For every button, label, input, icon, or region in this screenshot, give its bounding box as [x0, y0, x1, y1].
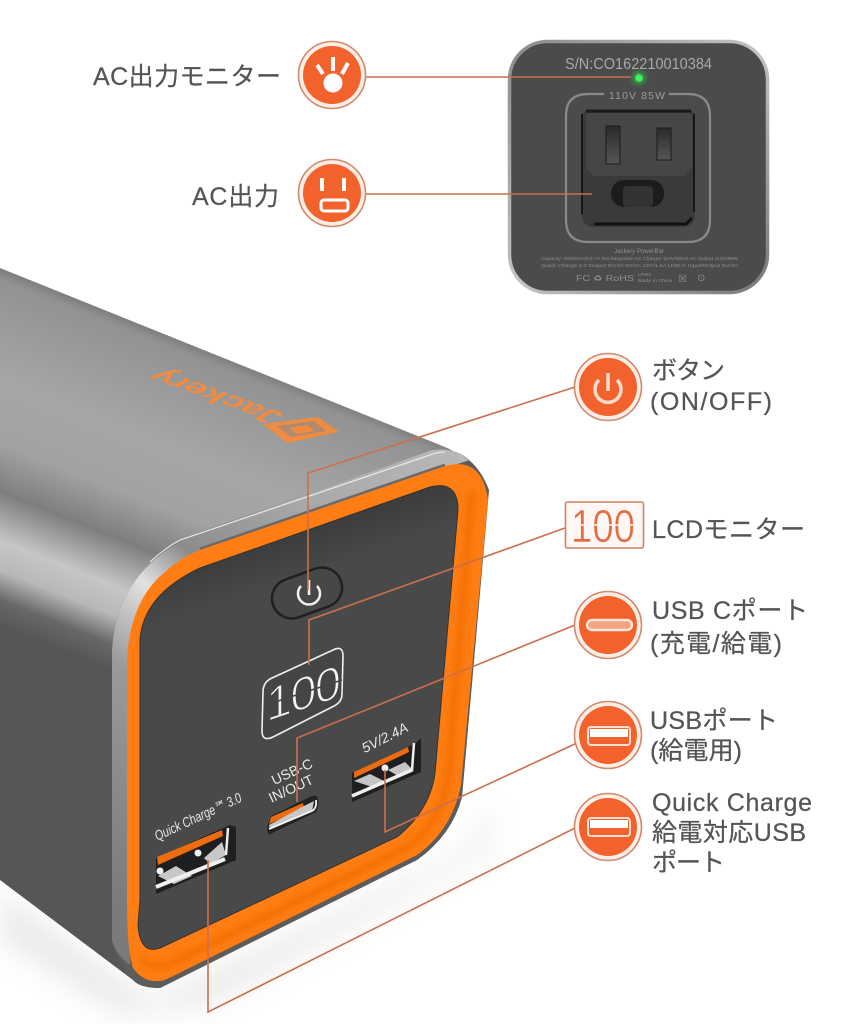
label: USB port: [650, 707, 778, 765]
label: Quick Charge port: Quick Charge: [652, 789, 812, 817]
label: power button: [650, 357, 772, 416]
line: LCD: [309, 528, 565, 665]
fine print: Jackery PowerBar: [614, 249, 664, 255]
icon: power button: [574, 354, 642, 420]
power button: [266, 562, 348, 624]
label: Quick Charge port: ポート: [652, 849, 725, 877]
label: Quick Charge port: 給電対応USB: [652, 819, 806, 847]
fine print: Capacity: 20800mAh/3.7V Rechargeable AC Charger 110V/60HZ AC Output 110V/85W: [541, 256, 739, 261]
AC outlet socket: [582, 110, 695, 227]
line: USB-C: [297, 625, 575, 802]
USB-C port: [267, 796, 318, 834]
serial number: S/N:CO162210010384: [565, 56, 712, 73]
orange bumper: [127, 464, 488, 981]
fine print: FC ♻ RoHS: [576, 274, 634, 283]
label: LCD monitor: LCDモニター: [652, 516, 805, 544]
line: Quick Charge: [208, 827, 577, 1012]
line: AC output: [366, 193, 592, 195]
icon: AC output monitor: [298, 42, 366, 108]
bezel inner shade: [200, 465, 445, 549]
line: USB: [385, 743, 577, 832]
panel: back face of device with AC outlet: [510, 42, 768, 292]
Jackery logo: Jackery: [143, 363, 289, 430]
body top and side faces: [0, 268, 489, 988]
callout leader lines: [208, 77, 631, 1012]
label: USB port: (給電用): [650, 737, 742, 765]
fine print: LP084: [638, 272, 652, 277]
icon: AC output: [298, 160, 366, 226]
metal bezel highlight: [112, 449, 470, 965]
LCD display: 100: [266, 655, 341, 733]
line: power button: [308, 387, 575, 590]
label: USB-C port: USB Cポート: [652, 597, 808, 625]
label: AC output: AC出力: [192, 183, 279, 211]
fine print: ⊙: [697, 273, 705, 284]
outlet frame: [566, 94, 710, 242]
fine print: [541, 249, 739, 285]
label: USB port: USBポート: [650, 707, 778, 735]
USB port: [352, 738, 421, 802]
back plate: [510, 42, 768, 292]
label: AC output monitor: AC出力モニター: [93, 63, 281, 91]
voltage rating: 110V 85W: [609, 90, 665, 102]
USB-C port label: IN/OUT: [266, 771, 316, 806]
fine print: ☒: [678, 274, 687, 285]
dark bezel base: [112, 450, 489, 988]
icon: USB-C port: [574, 592, 642, 658]
fine print: Made in China: [638, 278, 673, 283]
5V/2.4A label: 5V/2.4A: [359, 719, 411, 756]
fine print: Quick Charge 3.0 Output 5V/3A 9V/2A 12V/1.5A USB-C Input/Output 5V/3A: [541, 263, 738, 268]
front panel: [138, 486, 458, 949]
line: AC monitor: [366, 76, 631, 78]
label: USB-C port: (充電/給電): [650, 630, 782, 658]
USB-C port label: USB-C: [269, 755, 315, 788]
floor shadow under device: [0, 800, 490, 1015]
label: USB-C port: [650, 597, 808, 658]
Quick Charge label: Quick Charge℠ 3.0: [152, 789, 244, 844]
green LED: [633, 72, 645, 84]
USB-C port label: [266, 755, 316, 806]
Jackery logo: [143, 363, 339, 443]
label: power button: ボタン: [652, 357, 725, 385]
label: Quick Charge port: [652, 789, 812, 877]
icon: LCD monitor: 100: [571, 500, 635, 552]
Quick Charge USB port: [156, 825, 236, 894]
icon: USB port: [574, 702, 642, 768]
panel: power bank body: [0, 268, 489, 988]
label: power button: (ON/OFF): [650, 388, 772, 416]
icon: Quick Charge port: [574, 794, 642, 860]
